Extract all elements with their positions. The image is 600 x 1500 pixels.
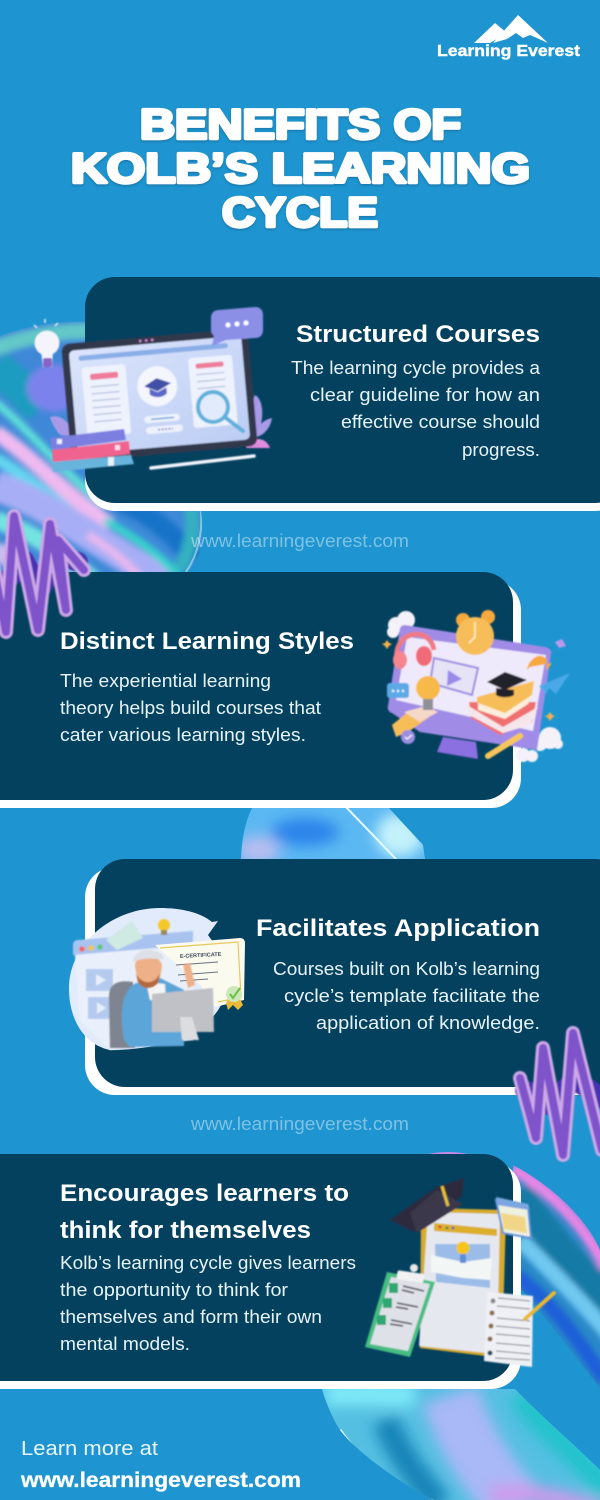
title: BENEFITS OF [140, 100, 461, 148]
browser window [73, 919, 193, 1050]
panel: encourages learners [0, 1154, 521, 1389]
title [71, 100, 530, 236]
icon: graduation cap [390, 1178, 464, 1233]
tablet [61, 328, 258, 462]
icon: paper plane [539, 673, 570, 694]
phone [419, 1208, 506, 1358]
icon: pencil [525, 1293, 554, 1319]
icon: calendar [496, 1197, 531, 1238]
icon: stack of books [50, 429, 134, 472]
text: structured courses [291, 321, 541, 460]
monitor [388, 625, 551, 759]
certificate: E-CERTIFICATE [180, 952, 222, 960]
icon: notepad [484, 1292, 533, 1367]
watermark: www.learningeverest.com [190, 1114, 409, 1134]
decorative purple squiggle: left [0, 516, 84, 632]
title: KOLB’S LEARNING [71, 144, 530, 192]
icon: chat bubble [211, 307, 263, 346]
illustration: tablet with course [34, 307, 272, 472]
footer call to action: Learn more at [21, 1438, 158, 1460]
decorative swirl peek above panel four [422, 1152, 474, 1164]
watermark: www.learningeverest.com [190, 531, 409, 551]
text: encourages learners: the opportunity to think for [60, 1280, 288, 1300]
text: structured courses: The learning cycle provides a [291, 358, 541, 378]
text: encourages learners [60, 1180, 356, 1354]
text: structured courses: effective course should [341, 412, 540, 432]
icon: light bulb [34, 319, 60, 367]
text: distinct learning styles: The experiential learning [60, 671, 271, 691]
icon: books and cap [467, 672, 538, 735]
logo [437, 15, 581, 60]
icon: clouds [387, 611, 563, 762]
icon: stylus [151, 456, 254, 468]
icon: video window [430, 658, 478, 695]
illustration: phone, cap and clipboards [365, 1178, 554, 1367]
text: facilitates application [256, 915, 540, 1033]
icon: bulb in hand [392, 676, 440, 744]
decorative swirl: lower right [513, 1165, 600, 1388]
text: distinct learning styles: Distinct Learning Styles [60, 628, 354, 655]
decorative swirl: bottom right [320, 1385, 600, 1500]
text: structured courses: clear guideline for how an [310, 385, 540, 405]
illustration background blob [69, 908, 226, 1050]
title: CYCLE [222, 188, 378, 236]
text: facilitates application: application of knowledge. [316, 1013, 540, 1033]
decorative swirl: upper left [0, 318, 205, 582]
illustration: desktop with learning items [382, 610, 570, 762]
text: facilitates application: Facilitates Application [256, 915, 540, 942]
panel: facilitates application [85, 859, 600, 1095]
text: encourages learners: themselves and form their own [60, 1307, 322, 1327]
text: distinct learning styles: cater various learning styles. [60, 725, 306, 745]
text: encourages learners: Encourages learners to [60, 1180, 349, 1207]
text: structured courses: progress. [462, 440, 540, 460]
icon: leaves [50, 395, 272, 448]
footer call to action: www.learningeverest.com [20, 1469, 301, 1492]
decorative swirl: centre [241, 808, 425, 859]
icon: pencil [488, 736, 520, 756]
icon: mountains [474, 15, 548, 43]
icon: chat bubble blue [387, 683, 409, 698]
logo wordmark: Learning Everest [437, 43, 581, 60]
illustration: man with e-certificate [69, 908, 245, 1050]
footer call to action [20, 1438, 301, 1492]
icon: bell [527, 656, 552, 671]
text: facilitates application: Courses built on Kolb’s learning [273, 959, 540, 979]
text: encourages learners: think for themselves [60, 1217, 311, 1244]
text: facilitates application: cycle’s template facilitate the [284, 986, 540, 1006]
icon: stars and gem [382, 639, 566, 721]
text: distinct learning styles: theory helps build courses that [60, 698, 321, 718]
icon: headphones [393, 634, 434, 669]
panel: distinct learning styles [0, 572, 521, 808]
text: structured courses: Structured Courses [296, 321, 540, 348]
icon: alarm clock [456, 610, 495, 655]
decorative purple squiggle: right [520, 1033, 600, 1155]
man at computer [109, 950, 214, 1048]
panel: structured courses [85, 277, 600, 511]
certificate [155, 938, 245, 1010]
text: encourages learners: Kolb’s learning cycle gives learners [60, 1253, 356, 1273]
icon: clipboard [365, 1264, 435, 1357]
text: distinct learning styles [60, 628, 354, 745]
icon: magnifier [198, 392, 243, 431]
text: encourages learners: mental models. [60, 1334, 190, 1354]
